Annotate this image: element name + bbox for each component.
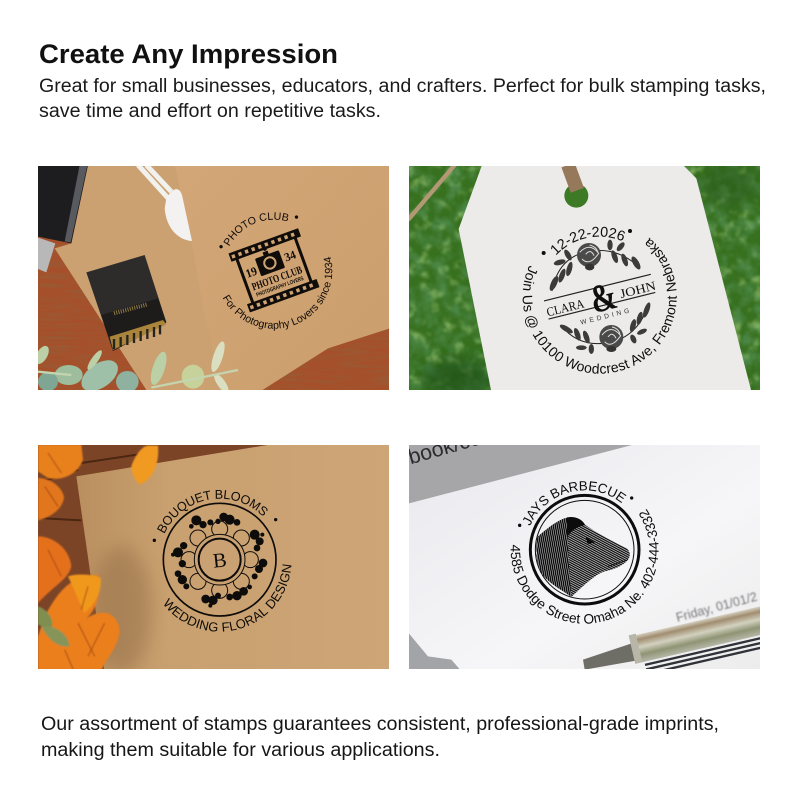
panel: jays barbecue stamp on white paper (405, 421, 760, 669)
stamp: jays barbecue (510, 481, 659, 624)
grey printed band (405, 421, 640, 504)
film strip frame: PHOTO CLUB (250, 264, 304, 293)
SD card (86, 255, 166, 351)
kraft paper (76, 443, 390, 673)
white cord and clip (138, 165, 192, 241)
names and lines: JOHN (618, 279, 657, 301)
names and lines (541, 263, 661, 334)
monogram medallion (194, 534, 245, 585)
outer ring (163, 503, 276, 616)
flower shadow (91, 546, 151, 673)
twine left (408, 165, 455, 220)
grey printed band: book/com (405, 421, 501, 469)
film strip frame (229, 228, 319, 312)
panel: wedding stamp on white tag (409, 166, 760, 390)
double ring (530, 495, 639, 604)
clip at bottom left (408, 632, 463, 673)
moss texture (408, 162, 761, 398)
monogram medallion: B (212, 549, 228, 573)
film strip frame: PHOTOGRAPHY LOVERS (256, 276, 305, 299)
curved text: bouquet blooms: BOUQUET BLOOMS (157, 490, 268, 534)
top rose wreath (548, 240, 642, 292)
film strip frame: 34 (282, 247, 298, 264)
icon: cow head (536, 517, 630, 597)
closing text: making them suitable for various applications. (41, 740, 440, 761)
green leaves (32, 340, 238, 397)
names and lines: WEDDING (580, 307, 633, 327)
curved text: jays barbecue: JAYS BARBECUE (523, 481, 626, 526)
names and lines: & (585, 273, 621, 322)
intro text: save time and effort on repetitive tasks. (39, 101, 381, 122)
black adapter (38, 165, 88, 272)
envelope back (55, 165, 228, 395)
orange flowers (38, 445, 158, 673)
curved text: address and phone: 4585 Dodge Street Omaha Ne. 402-444-3332 (510, 509, 659, 624)
tag hole and twine (564, 165, 588, 208)
curved text: wedding floral design: WEDDING FLORAL DESIGN (164, 564, 292, 632)
curved text: date: 12-22-2026 (551, 226, 625, 255)
curved text: address: Join Us @ 10100 Woodcrest Ave, Fremont Nebraska (522, 238, 677, 374)
printed date: Friday, 01/01/2 (674, 590, 759, 625)
envelope front (175, 165, 390, 395)
floral wreath (171, 513, 267, 608)
panel: photo club stamp on kraft envelope (38, 166, 389, 390)
closing text (41, 714, 719, 761)
bottom rose wreath (559, 302, 652, 354)
panel: bouquet blooms stamp on kraft paper (38, 445, 389, 669)
white tag (459, 165, 752, 395)
title: Create Any Impression (39, 39, 338, 69)
closing text: Our assortment of stamps guarantees consistent, professional-grade imprints, (41, 714, 719, 735)
film strip frame: 19 (244, 264, 259, 281)
intro text (39, 76, 766, 122)
stamp: bouquet blooms (152, 490, 292, 632)
camera icon (252, 243, 285, 276)
curved text: for photography lovers: For Photography Lovers since 1934 (222, 256, 332, 331)
stamp: wedding (522, 226, 677, 374)
intro text: Great for small businesses, educators, and crafters. Perfect for bulk stamping tasks, (39, 76, 766, 97)
silver pen (583, 600, 790, 677)
stamp: photo club (219, 212, 332, 331)
curved text: photo club: PHOTO CLUB (223, 212, 288, 246)
names and lines: CLARA (545, 296, 586, 319)
